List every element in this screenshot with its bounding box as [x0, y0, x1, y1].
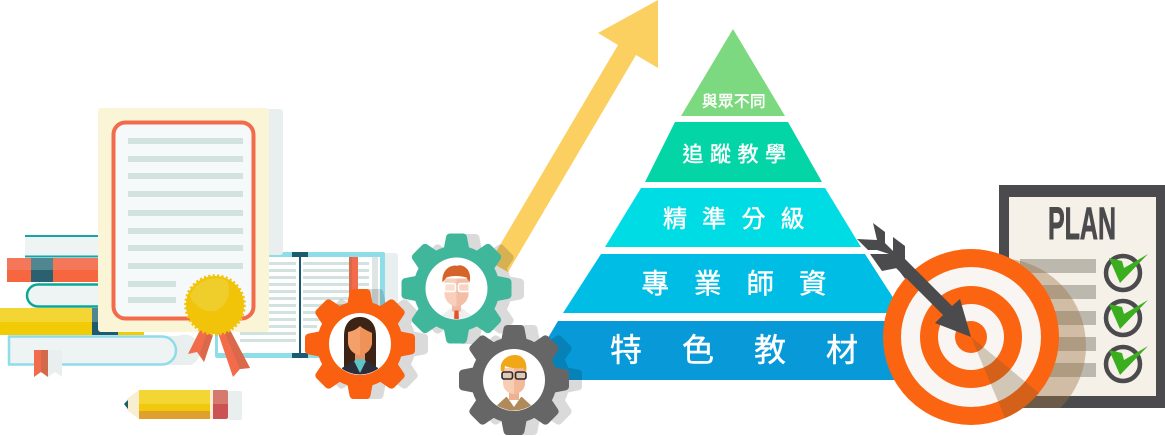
layer: 與眾不同 [681, 29, 785, 116]
check 2 [1106, 300, 1148, 335]
target shadow [1012, 259, 1086, 408]
growth arrow [490, 0, 658, 272]
layer: 追蹤教學 [645, 122, 822, 182]
red book [7, 258, 102, 282]
bottom book [9, 335, 200, 377]
layer: 特色教材 [523, 321, 943, 380]
face: woman [342, 317, 378, 376]
gold seal [186, 276, 244, 334]
yellow book [0, 308, 144, 335]
open book [215, 252, 398, 358]
certificate [98, 108, 283, 377]
arrow in target [896, 259, 971, 337]
arrow shadow [971, 337, 1039, 418]
layer: 專業師資: 專業師資 [642, 268, 826, 299]
top book [25, 235, 105, 258]
pencil [124, 390, 242, 420]
gear: grey man [463, 329, 578, 431]
layer: 與眾不同: 與眾不同 [702, 92, 766, 110]
plan lines [1020, 259, 1096, 377]
check 1 [1106, 254, 1148, 290]
arrow fletching [857, 223, 925, 292]
layer: 精準分級: 精準分級 [663, 206, 804, 233]
plan board [999, 185, 1165, 408]
layer: 專業師資 [563, 254, 903, 313]
layer: 特色教材: 特色教材 [610, 332, 858, 368]
gear: orange woman [309, 293, 424, 395]
ribbon [188, 330, 250, 377]
pyramid [523, 29, 943, 380]
face: blonde man [497, 355, 531, 410]
check 3 [1106, 346, 1148, 381]
layer: 精準分級 [605, 188, 861, 247]
target [883, 249, 1059, 425]
face: teal man [442, 265, 471, 319]
teal book [27, 284, 105, 306]
gear: teal man [406, 238, 520, 340]
layer: 追蹤教學: 追蹤教學 [682, 144, 786, 166]
book stack [0, 235, 200, 377]
